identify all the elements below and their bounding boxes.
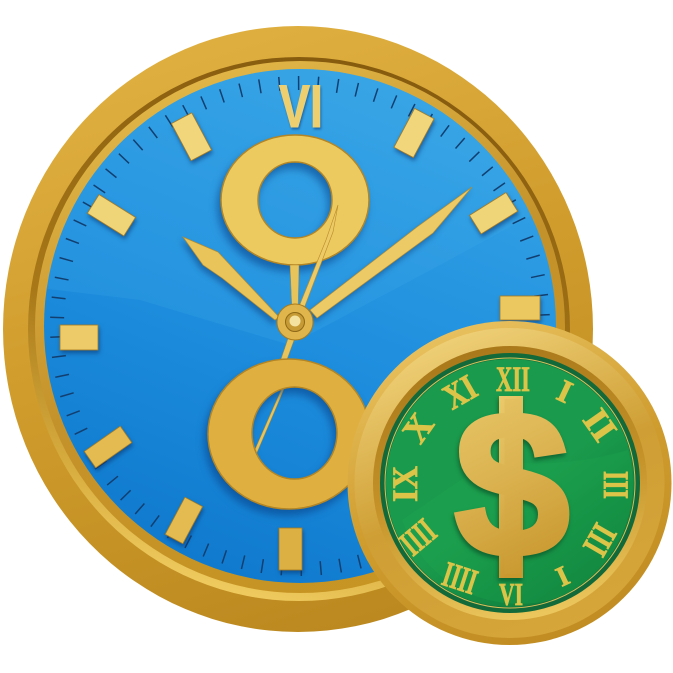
marker 11 [171,113,211,161]
numeral VI: VI [499,576,523,612]
dollar clock [348,321,672,645]
main clock rim [3,26,593,632]
marker 12 numeral: VI [279,73,323,140]
centre hub [277,304,313,340]
marker 3 [500,296,540,320]
hour markers [60,108,540,570]
numeral XII: XII [496,359,530,399]
numeral III lower right: III [575,517,625,563]
marker 10 [87,195,135,236]
marker 2 [470,193,518,234]
dollar clock rim [348,321,672,645]
second hand tail [253,330,297,456]
numeral IIII left: IIII [392,511,444,563]
lower ring [208,359,370,509]
numeral IIII lower: IIII [438,554,482,602]
minute hand [310,187,472,318]
numeral II: II [575,401,625,449]
upper ring [221,135,369,265]
numeral IX: IX [385,466,425,502]
roman numerals [385,359,636,612]
main clock blue face [40,60,560,583]
hour hand [183,237,279,320]
numeral X: X [394,406,442,450]
main clock [3,26,593,632]
marker 8 [84,426,132,468]
marker 7 [165,497,203,544]
green face [380,353,640,613]
numeral I lower: I [551,559,574,592]
marker 1 [394,108,434,158]
marker 9 [60,325,98,350]
numeral XI: XI [436,367,484,417]
numeral III: III [596,471,636,499]
centre stem [290,265,299,310]
marker 6 [279,528,302,570]
numeral I: I [552,372,578,410]
dollar sign: $ [454,369,570,601]
second hand [298,205,338,311]
minute ticks [55,81,545,571]
